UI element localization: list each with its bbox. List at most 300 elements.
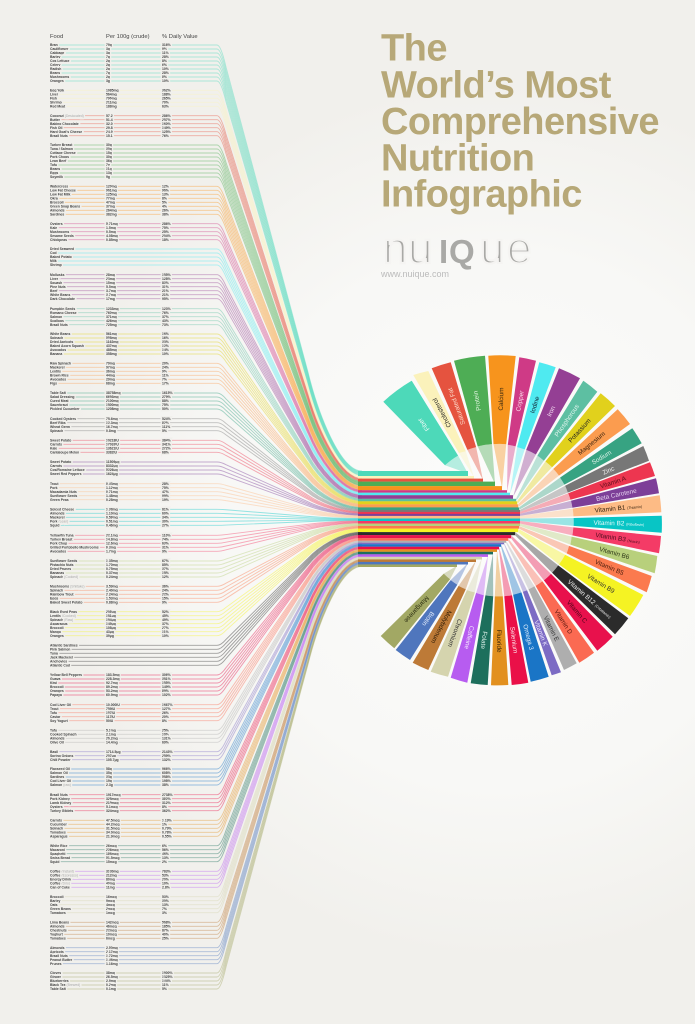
food list: fiber: 316% (162, 43, 171, 47)
food list: sodium: 38758mg (106, 391, 121, 395)
food list: vitamin B3: 9% (162, 550, 167, 554)
food list: protein: 11g (106, 167, 112, 171)
food list: vitamin B1: 0.28mg (106, 498, 118, 502)
food list: fiber: 2g (106, 59, 110, 63)
food list: zinc: Wheat Germ (50, 425, 70, 429)
food list: vitamin B2: 0.58mg (106, 516, 118, 520)
food list: fiber: Celery (50, 63, 60, 67)
food list: omega 3 (50, 767, 171, 787)
food list: vitamin D: Trout (50, 707, 59, 711)
food list: vitamin B1: 28% (162, 482, 169, 486)
food list: omega 3: 58g (106, 767, 112, 771)
food list: potassium: 14% (162, 348, 169, 352)
segment: copper: Copper (515, 389, 526, 412)
food list: potassium: 561mg (106, 332, 117, 336)
segment: vitamin B3: Vitamin B3 (Niacin) (595, 532, 640, 546)
connector lines: folate (51, 552, 362, 862)
food list: potassium: Banana (50, 352, 62, 356)
food list: cholesterol: Liver (50, 92, 59, 96)
food list: potassium: White Beans (50, 332, 70, 336)
food list: magnesium: Mackerel (50, 366, 65, 370)
food list: iodine: Milk (50, 259, 57, 263)
segment: fluoride: Fluoride (495, 629, 502, 653)
food list: vitamin A: 17033IU (106, 442, 119, 446)
food list: selenium: 362% (162, 809, 171, 813)
food list: vitamin B1: 0.71mg (106, 490, 118, 494)
food list: fiber: 9% (162, 47, 167, 51)
food list: iron: Squash (50, 281, 62, 285)
connector lines: vitamin K (51, 543, 362, 760)
food list: fiber (50, 43, 171, 83)
food list: protein: 7g (106, 163, 110, 167)
food list: phosphorous: 725mg (106, 323, 117, 327)
food list: vitamin B9: 108μg (106, 626, 116, 630)
food list: vitamin B9: 45% (162, 614, 169, 618)
food list: zinc: 0.8mg (106, 429, 116, 433)
connector lines: magnesium (51, 363, 362, 507)
food list: vitamin B3: 22.1mg (106, 534, 118, 538)
food list: vitamin D: 759IU (106, 707, 116, 711)
food list: omega 3: 588% (162, 775, 171, 779)
table header: Food (50, 34, 63, 40)
food list: cholesterol: 63% (162, 104, 169, 108)
food list: sodium: Pickled Cucumber (50, 407, 80, 411)
rows: vitamin B2 (50, 508, 362, 528)
food list: zinc: Spinach (50, 429, 63, 433)
food list: magnesium: 9% (162, 370, 167, 374)
food list: fiber: 6% (162, 63, 167, 67)
food list: molybdenum: 46mcg (106, 924, 117, 928)
food list: vitamin B12 (50, 644, 78, 668)
food list: fiber: 2g (106, 63, 110, 67)
food list: magnesium: 44mg (106, 374, 115, 378)
food list: vitamin B2: 27% (162, 524, 169, 528)
food list: vitamin E: 5.1mg (106, 728, 116, 732)
food list: copper: 0.5mg (106, 230, 116, 234)
connector lines: vitamin B5 (51, 526, 362, 602)
food list: sodium: 1615% (162, 391, 173, 395)
food list: caffeine: 80mg (106, 878, 115, 882)
food list: caffeine: Can of Coke (50, 886, 70, 890)
food list: fluoride: Cucumber (50, 822, 67, 826)
food list: vitamin E: 25% (162, 728, 169, 732)
food list: vitamin D: 10,000IU (106, 703, 120, 707)
segment: vitamin B1: Vitamin B1 (Thiamin) (594, 503, 643, 515)
food list: chromium: 3% (162, 911, 167, 915)
food list: vitamin A: 68% (162, 450, 169, 454)
rows: saturated fat (50, 114, 362, 481)
food list: iodine: Shrimp (50, 263, 62, 267)
food list: magnesium: 97mg (106, 366, 115, 370)
food list: protein: 30g (106, 147, 112, 151)
food list: fiber: 10% (162, 79, 169, 83)
food list: copper: 18% (162, 238, 169, 242)
food list: calcium: Green Snap Beans (50, 204, 80, 208)
food list: vitamin B6: Sunflower Seeds (50, 559, 77, 563)
segment: cholesterol (358, 371, 474, 479)
food list: caffeine: Coffee (Instant) (50, 870, 74, 874)
food list: protein: 30g (106, 155, 112, 159)
segment: fiber (358, 381, 468, 476)
food list: vitamin C (50, 673, 171, 697)
food list: vitamin E: Almonds (50, 736, 65, 740)
food list: vitamin B12: Anchovies (50, 660, 67, 664)
food list: fiber: Cauliflower (50, 47, 69, 51)
food list: phosphorous: 123% (162, 307, 171, 311)
food list: vitamin E: Cooked Spinach (50, 732, 77, 736)
food list: zinc (50, 417, 171, 433)
segment: potassium (358, 393, 615, 504)
food list: calcium: 12% (162, 184, 169, 188)
food list: vitamin B3: 1.7mg (106, 550, 116, 554)
segment: fluoride (358, 549, 508, 685)
food list: iron: 155% (162, 273, 171, 277)
food list: sodium: Sauerkraut (50, 403, 69, 407)
food list: phosphorous (50, 307, 171, 327)
food list: protein: Eggs (50, 171, 58, 175)
food list: vitamin B2: 0.51mg (106, 520, 118, 524)
food list: fluoride: Spinach (50, 826, 63, 830)
food list: vitamin B6: Bananas (50, 571, 64, 575)
food list: magnesium: Brown Rice (50, 374, 69, 378)
segment: vitamin K: Vitamin K (532, 619, 549, 648)
logo: nuique: u (480, 224, 504, 273)
food list: iron (50, 273, 171, 301)
food list: protein: 30g (106, 143, 112, 147)
food list: vitamin B6: 0.37mg (106, 571, 118, 575)
title: Comprehensive (381, 101, 659, 143)
food list: vitamin B3: Turkey Breast (50, 538, 73, 542)
rows: calcium (50, 184, 362, 490)
food list: vitamin B2: 34% (162, 516, 169, 520)
food list: vitamin B5: Eggs (50, 596, 58, 600)
rows: vitamin B12 (50, 532, 362, 668)
connector lines: sodium (51, 393, 362, 509)
food list: sodium: 75% (162, 403, 169, 407)
food list: molybdenum: Lima Beans (50, 920, 69, 924)
food list: molybdenum: Tomatoes (50, 936, 66, 940)
food list: molybdenum: 22mcg (106, 928, 117, 932)
food list: folate: Spaghetti (50, 852, 66, 856)
food list: molybdenum: 10mcg (106, 932, 117, 936)
food list: caffeine: 212mg (106, 874, 117, 878)
food list: selenium: 1917mcg (106, 793, 121, 797)
food list: fiber: Barley (50, 55, 60, 59)
food list: vitamin B1: Sunflower Seeds (50, 494, 77, 498)
food list: fiber: Radish (50, 67, 61, 71)
food list: selenium: 382% (162, 797, 171, 801)
rows: biotin (50, 562, 362, 966)
food list: fluoride (50, 818, 172, 838)
food list: vitamin E: 69% (162, 740, 169, 744)
logo: nuique: e (507, 224, 531, 273)
food list: vitamin E: 26.2mg (106, 736, 118, 740)
food list: vitamin C: Guava (50, 677, 60, 681)
food list: protein: Turkey Breast (50, 143, 73, 147)
rows: copper (50, 222, 362, 492)
food list: vitamin B6: 67% (162, 559, 169, 563)
segment: vitamin B2: Vitamin B2 (Riboflavin) (593, 520, 644, 528)
food list: zinc: 524% (162, 417, 171, 421)
food list: cholesterol: 796mg (106, 96, 117, 100)
food list: vitamin A: 19218IU (106, 438, 119, 442)
segment: selenium: Selenium (508, 626, 519, 654)
food list: copper: Oysters (50, 222, 63, 226)
food list: vitamin A: Cantaloupe Melon (50, 450, 79, 454)
food list: beta carotene: 11509μg (106, 460, 119, 464)
food list: vitamin A: Sweet Potato (50, 438, 71, 442)
food list: vitamin C: 53.2mg (106, 689, 118, 693)
food list: manganese: Black Tea (Brewed) (50, 983, 80, 987)
food list: omega 3: Salmon Oil (50, 771, 68, 775)
food list: vitamin K: 259% (162, 754, 171, 758)
food list: vitamin B3: 110% (162, 534, 170, 538)
food list: vitamin B2: Mackerel (50, 516, 65, 520)
food list: vitamin B1 (50, 482, 169, 502)
food list: sodium: 50% (162, 407, 169, 411)
food list: manganese: Ginger (50, 975, 62, 979)
food list: vitamin B9: Oranges (50, 634, 64, 638)
food list: vitamin K: Spring Onions (50, 754, 73, 758)
food list: vitamin D (50, 703, 173, 723)
food list: fiber: 2g (106, 67, 110, 71)
food list: vitamin C: 60.9mg (106, 693, 118, 697)
food list: potassium: Dried Apricots (50, 340, 73, 344)
food list: fiber: Cos Lettuce (50, 59, 70, 63)
food list: fluoride: 47.5mcg (106, 818, 120, 822)
food list: vitamin B2: 0.46mg (106, 524, 118, 528)
food list: vitamin D: 8% (162, 719, 167, 723)
food list: vitamin D: Soy Yogurt (50, 719, 69, 723)
food list: vitamin E: Tofu (50, 728, 57, 732)
food list: fiber: 7g (106, 71, 110, 75)
food list: copper: 0.85mg (106, 238, 118, 242)
food list: copper: 4.08mg (106, 234, 118, 238)
food list: copper: 204% (162, 234, 171, 238)
segment: caffeine (358, 554, 488, 683)
food list: magnesium: 7% (162, 378, 167, 382)
food list: vitamin B5: 2.40mg (106, 588, 118, 592)
food list: omega 3: Sardines (50, 775, 64, 779)
connector lines: vitamin C (51, 535, 362, 695)
food list: vitamin B9: Black Eyed Peas (50, 610, 77, 614)
segment: vitamin B1 (358, 495, 661, 519)
food list: magnesium: 29mg (106, 378, 115, 382)
food list: vitamin B5: Spinach (50, 588, 63, 592)
food list: vitamin B6: 0.24mg (106, 575, 118, 579)
segment: biotin: Biotin (420, 610, 435, 627)
food list: protein: Soymilk (50, 175, 63, 179)
food list: vitamin D: 127% (162, 707, 171, 711)
food list: iodine (50, 247, 74, 267)
food list: phosphorous: 43% (162, 319, 169, 323)
food list: iron: 17mg (106, 297, 115, 301)
connector lines: biotin (51, 562, 362, 964)
food list: vitamin B3: 14.8mg (106, 538, 118, 542)
food list: vitamin B1: 19% (162, 498, 169, 502)
food list: calcium: 47mg (106, 200, 115, 204)
food list: fluoride: 31.5mcg (106, 826, 120, 830)
title: World’s Most (381, 64, 612, 106)
food list: magnesium: Avocados (50, 378, 66, 382)
food list: cholesterol: 188mg (106, 104, 117, 108)
food list: selenium: Pork Kidney (50, 797, 70, 801)
food list: fiber: Oranges (50, 79, 64, 83)
food list: zinc: 82% (162, 421, 169, 425)
food list: vitamin B2: Pork (Lean) (50, 520, 68, 524)
food list: vitamin B9: Lentils (Cooked) (50, 614, 76, 618)
table header (50, 34, 198, 40)
food list: vitamin B3: 31% (162, 546, 169, 550)
food list: vitamin B9: 27% (162, 626, 169, 630)
connector lines: vitamin B2 (51, 509, 362, 525)
food list: iron: 83% (162, 281, 169, 285)
food list: vitamin B6: 18% (162, 571, 169, 575)
food list: phosphorous: 37% (162, 315, 169, 319)
food list: vitamin B5: Mushrooms (Shiitake) (50, 584, 84, 588)
food list: fiber: Mushrooms (50, 75, 69, 79)
food list: cholesterol: 362% (162, 88, 171, 92)
segment: vitamin C (358, 535, 613, 651)
segment: vitamin B5: Vitamin B5 (594, 559, 625, 577)
food list: iodine: Cod (50, 251, 57, 255)
food list: vitamin B6: Spinach (Cooked) (50, 575, 78, 579)
food list: vitamin B9: 149μg (106, 622, 116, 626)
food list: magnesium: Raw Spinach (50, 362, 71, 366)
food list: vitamin A: 3382IU (106, 450, 117, 454)
rows: manganese (50, 564, 362, 991)
connector lines: fiber (51, 45, 362, 476)
food list: saturated fat: 29.8 (106, 126, 113, 130)
segment: calcium (358, 355, 516, 490)
food list: iron: 23mg (106, 277, 115, 281)
food list: vitamin B5: 9% (162, 600, 167, 604)
food list: vitamin B9 (50, 610, 169, 638)
food list: vitamin B5: 24% (162, 588, 169, 592)
segment: iodine: Iodine (529, 395, 542, 414)
food list: folate: 6% (162, 844, 167, 848)
food list: sodium: 2100mg (106, 399, 119, 403)
food list: vitamin C: 92.7mg (106, 681, 118, 685)
food list: manganese: 0.1mg (106, 987, 116, 991)
title (381, 28, 659, 216)
food list: selenium: Brazil Nuts (50, 793, 68, 797)
rows: fiber (50, 43, 362, 475)
food list: phosphorous: 76% (162, 311, 169, 315)
food list: vitamin B5: Baked Sweet Potato (50, 600, 82, 604)
food list: vitamin A (50, 438, 171, 454)
food list: saturated fat: Butter (50, 118, 61, 122)
rows: zinc (50, 417, 362, 511)
title: Infographic (381, 174, 582, 216)
connector lines: chromium (51, 557, 362, 913)
food list: beta carotene: Sweet Red Peppers (50, 472, 82, 476)
food list: folate: 226mcg (106, 848, 119, 852)
food list: fiber: 3g (106, 79, 110, 83)
food list: vitamin D: Tofu (50, 711, 57, 715)
food list: saturated fat: Fish Oil (50, 126, 62, 130)
food list: potassium (50, 332, 169, 356)
food list: vitamin B9: 39μg (106, 634, 114, 638)
food list: vitamin A: 384% (162, 438, 171, 442)
rows: caffeine (50, 554, 362, 890)
food list: phosphorous: Salmon (50, 315, 62, 319)
food list: fiber: 11% (162, 51, 169, 55)
food list: biotin: Apricots (50, 950, 64, 954)
food list: iron: 128% (162, 277, 171, 281)
food list: vitamin B2: Almonds (50, 512, 65, 516)
food list: vitamin B6: Pistachio Nuts (50, 563, 74, 567)
food list: calcium: 4% (162, 204, 167, 208)
food list: calcium: 96% (162, 188, 169, 192)
food list: vitamin B5: 0.88mg (106, 600, 118, 604)
food list: vitamin B3: 6.3mg (106, 546, 116, 550)
food list: manganese: 26.5mg (106, 975, 118, 979)
food list: fiber: 8% (162, 59, 167, 63)
food list: omega 3: Cod Liver Oil (50, 779, 71, 783)
food list: chromium: 4mcg (106, 903, 115, 907)
segment: biotin (358, 562, 468, 660)
food list: calcium: 125mg (106, 192, 117, 196)
food list: chromium: Barley (50, 899, 60, 903)
food list: fiber: 7g (106, 55, 110, 59)
food list: protein: Cottage Cheese (50, 151, 76, 155)
food list: cholesterol: Shrimp (50, 100, 62, 104)
connector lines: omega 3 (51, 544, 362, 785)
food list: folate: 15mcg (106, 860, 117, 864)
food list: beta carotene: Carrots (50, 464, 62, 468)
food list: protein: Pork Chops (50, 155, 69, 159)
food list: vitamin D: Cod Liver Oil (50, 703, 71, 707)
food list: folate: 46% (162, 852, 169, 856)
food list: manganese (50, 971, 173, 991)
food list: magnesium: Figs (50, 382, 57, 386)
food list: saturated fat: 57.2 (106, 114, 113, 118)
food list: iodine: Dried Seaweed (50, 247, 74, 251)
food list: vitamin C: 155% (162, 681, 171, 685)
food list: magnesium: 36mg (106, 370, 115, 374)
connector lines: zinc (51, 419, 362, 511)
segment: vitamin D: Vitamin D (553, 609, 574, 636)
food list: manganese: Table Salt (50, 987, 67, 991)
segment: iron: Iron (546, 405, 557, 418)
food list: vitamin C: 228.3mg (106, 677, 120, 681)
food list: vitamin B9: Spinach (Raw) (50, 618, 73, 622)
rows: vitamin K (50, 543, 362, 762)
segment: calcium: Calcium (498, 387, 505, 411)
food list: caffeine: 40mg (106, 882, 115, 886)
food list: vitamin B9: 52% (162, 610, 169, 614)
food list: vitamin B3: 63% (162, 542, 169, 546)
segment: selenium (358, 547, 528, 685)
food list: calcium: 120mg (106, 184, 117, 188)
food list: sodium: 1208mg (106, 407, 119, 411)
food list: manganese: 0.2mg (106, 983, 116, 987)
rows: protein (50, 143, 362, 486)
food list: molybdenum: Chestnuts (50, 928, 67, 932)
rows: vitamin C (50, 535, 362, 697)
food list: potassium: 485mg (106, 348, 117, 352)
food list: chromium: 2mcg (106, 907, 115, 911)
food list: saturated fat: 125% (162, 130, 171, 134)
food list: vitamin D: 50IU (106, 719, 114, 723)
food list: calcium: 26% (162, 208, 169, 212)
food list: cholesterol: Red Meat (50, 104, 66, 108)
food list: cholesterol: 1085mg (106, 88, 119, 92)
food list: potassium: 12% (162, 344, 169, 348)
food list: vitamin B3: Grilled Portobello Mushrooms (50, 546, 99, 550)
food list: fiber: 3g (106, 47, 110, 51)
